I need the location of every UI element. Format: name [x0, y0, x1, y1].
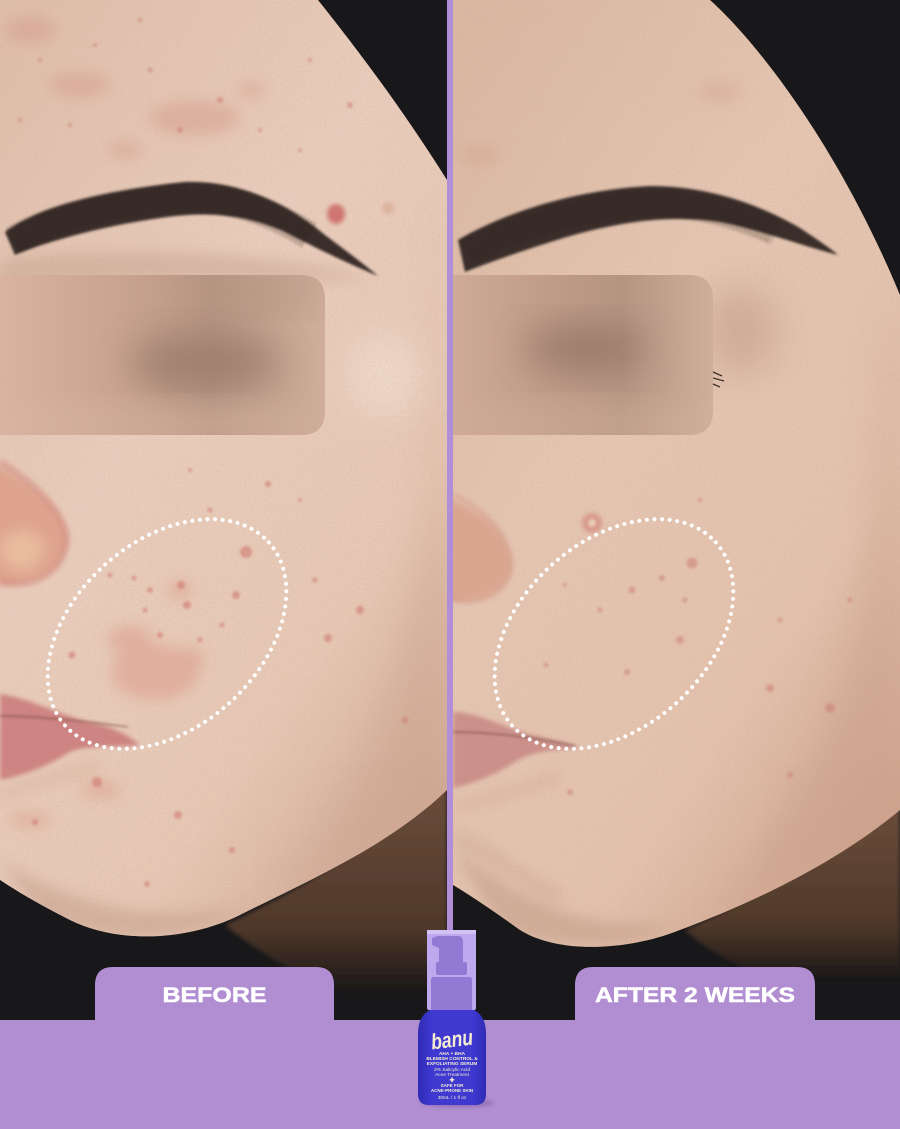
- nose: [453, 494, 515, 604]
- eyebrow: after: [458, 186, 838, 272]
- bottle body: [418, 1010, 486, 1105]
- label tab: before: [95, 967, 334, 1020]
- eye socket shadow: [704, 284, 776, 376]
- acne spots: [544, 498, 852, 795]
- eyebrow: before: [5, 182, 378, 276]
- bottle label: [426, 1024, 478, 1101]
- label tab: after 2 weeks: [575, 967, 815, 1020]
- bottle label: SAFE FOR: [441, 1083, 464, 1088]
- bottle label: EXFOLIATING SERUM: [427, 1061, 477, 1067]
- label tab: after 2 weeks: AFTER 2 WEEKS: [595, 984, 795, 1007]
- bottle label: AHA + BHA: [439, 1051, 466, 1057]
- jaw crease: [458, 836, 554, 895]
- nose: [0, 458, 66, 584]
- pore texture: [0, 0, 447, 950]
- pore texture: [460, 44, 870, 908]
- product bottle: [418, 930, 494, 1107]
- bottle label: ✚: [449, 1077, 455, 1084]
- face skin: [453, 0, 900, 947]
- bottle label: 2% Salicylic Acid: [434, 1067, 470, 1073]
- dotted circle: before: [3, 473, 331, 795]
- pump: [431, 936, 472, 1010]
- lips: [453, 712, 580, 788]
- dotted circle: after: [450, 473, 778, 795]
- blur mask: after: [453, 275, 713, 435]
- panel: before photo: [0, 0, 447, 1020]
- bottle label: ACNE-PRONE SKIN: [431, 1088, 473, 1093]
- under brow shadow: [0, 252, 370, 280]
- label tab: before: BEFORE: [162, 984, 266, 1007]
- face skin: [0, 0, 447, 936]
- bottle label: 30mL / 1 fl oz: [438, 1095, 467, 1101]
- bottom band: [0, 1020, 900, 1129]
- bottle label: BLEMISH CONTROL &: [426, 1056, 478, 1062]
- acne spots: [32, 468, 408, 887]
- bottle label: Acne Treatment: [435, 1072, 470, 1078]
- bottle label: banu: [430, 1024, 475, 1054]
- panel: after photo: [433, 0, 900, 1020]
- forehead redness: [4, 18, 264, 158]
- glass cap: [427, 930, 476, 1010]
- lips: [0, 694, 140, 780]
- center divider line: [447, 0, 453, 935]
- blur mask: before: [0, 274, 330, 441]
- forehead redness: [472, 84, 736, 160]
- cheek redness: [8, 581, 204, 827]
